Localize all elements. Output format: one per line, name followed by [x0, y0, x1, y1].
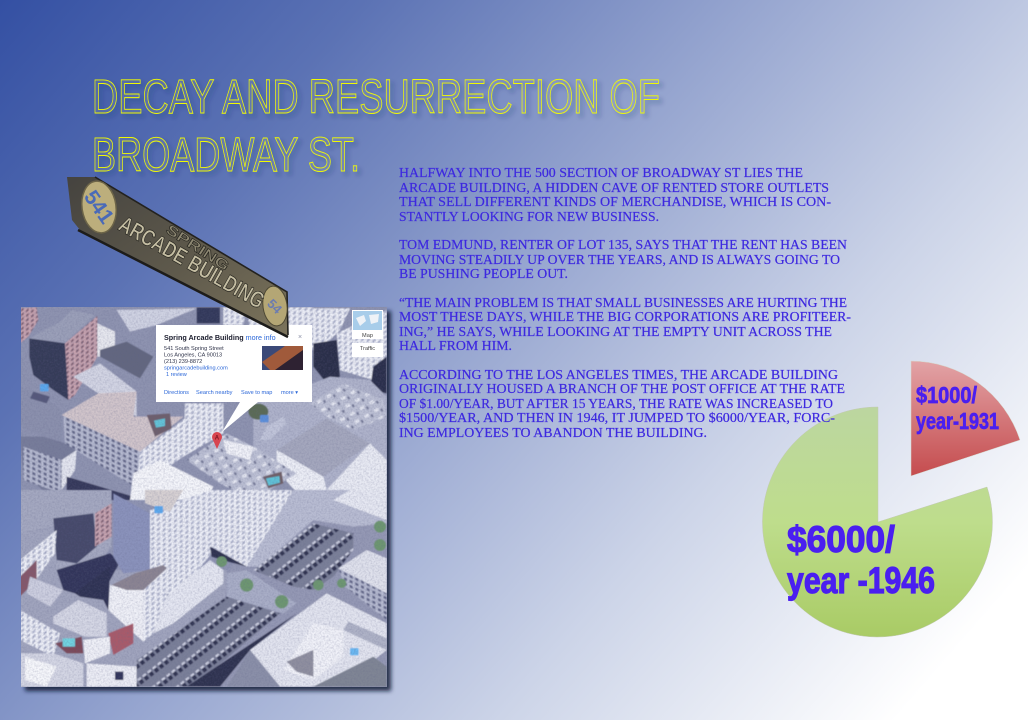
label: 1931: year-1931 [916, 408, 999, 434]
title: DECAY AND RESURRECTION OF [92, 71, 660, 124]
paragraph: los angeles times: ACCORDING TO THE LOS ANGELES TIMES, THE ARCADE BUILDING [399, 368, 838, 383]
title [92, 71, 660, 182]
info heading: Spring Arcade Building more info [164, 333, 276, 342]
sign upper edge [95, 177, 288, 335]
location marker [212, 432, 222, 449]
photo thumbnail [262, 346, 303, 370]
paragraph: arcade building: STANTLY LOOKING FOR NEW BUSINESS. [399, 210, 659, 225]
address: 1 review [166, 372, 188, 378]
close button: × [298, 334, 302, 341]
aerial lower half [20, 490, 390, 690]
address: springarcadebuilding.com [164, 366, 228, 372]
info window [156, 325, 312, 432]
sign medallion: 541: 541 [79, 186, 118, 228]
pie slice: 1931 [911, 361, 1020, 476]
map control: traffic: Traffic [360, 346, 375, 352]
pie chart [762, 361, 1020, 637]
paragraph: tom edmund: TOM EDMUND, RENTER OF LOT 135, SAYS THAT THE RENT HAS BEEN [399, 238, 847, 253]
label: 1946: year -1946 [787, 560, 935, 601]
paragraph: tom edmund [399, 238, 847, 282]
label: 1946 [787, 519, 935, 601]
paragraph: arcade building [399, 166, 831, 225]
label: 1931: $1000/ [916, 382, 978, 408]
sign lettering: spring: SPRING [163, 221, 233, 274]
sign board [67, 177, 288, 337]
paragraph: los angeles times: ORIGINALLY HOUSED A BRANCH OF THE POST OFFICE AT THE RATE [399, 382, 845, 397]
action links: more ▾ [281, 390, 298, 396]
sign lower edge [78, 230, 288, 337]
pie slice: 1946 [762, 407, 992, 637]
paragraph: quote [399, 296, 851, 354]
map control: map: Map [362, 333, 373, 339]
paragraph: los angeles times: $1500/YEAR, AND THEN IN 1946, IT JUMPED TO $6000/YEAR, FORC- [399, 411, 835, 426]
address: 541 South Spring Street [164, 346, 224, 352]
aerial map [20, 307, 390, 690]
action links [164, 390, 298, 395]
action links: Save to map [241, 390, 272, 396]
label: 1946: $6000/ [787, 519, 895, 560]
paragraph: tom edmund: MOVING STEADILY UP OVER THE YEARS, AND IS ALWAYS GOING TO [399, 253, 840, 268]
aerial upper half [20, 307, 390, 500]
paragraph: quote: HALL FROM HIM. [399, 339, 512, 354]
title: BROADWAY ST. [92, 129, 360, 182]
sign medallion: right [260, 285, 290, 327]
address: (213) 239-8872 [164, 359, 202, 365]
paragraph: quote: “THE MAIN PROBLEM IS THAT SMALL BUSINESSES ARE HURTING THE [399, 296, 847, 311]
paragraph: arcade building: THAT SELL DIFFERENT KINDS OF MERCHANDISE, WHICH IS CON- [399, 195, 831, 210]
paragraph: quote: MOST THESE DAYS, WHILE THE BIG CORPORATIONS ARE PROFITEER- [399, 310, 851, 325]
label: 1931 [916, 382, 999, 434]
action links: Search nearby [196, 390, 233, 396]
map control: map [352, 310, 383, 339]
aerial texture [21, 307, 387, 687]
paragraph: arcade building: ARCADE BUILDING, A HIDDEN CAVE OF RENTED STORE OUTLETS [399, 181, 829, 196]
arcade sign [67, 177, 290, 337]
paragraph: quote: ING,” HE SAYS, WHILE LOOKING AT THE EMPTY UNIT ACROSS THE [399, 325, 832, 340]
location marker: A [215, 436, 220, 442]
paragraph: los angeles times [399, 368, 845, 441]
map control: traffic [352, 343, 383, 357]
sign medallion: right: 54 [264, 296, 286, 317]
address [164, 346, 228, 378]
address: Los Angeles, CA 90013 [164, 352, 222, 358]
paragraph: arcade building: HALFWAY INTO THE 500 SECTION OF BROADWAY ST LIES THE [399, 166, 803, 181]
paragraph: los angeles times: OF $1.00/YEAR, BUT AFTER 15 YEARS, THE RATE WAS INCREASED TO [399, 397, 833, 412]
action links: Directions [164, 390, 189, 396]
sign lettering: arcade building: ARCADE BUILDING [115, 211, 269, 314]
article text [399, 166, 851, 441]
paragraph: tom edmund: BE PUSHING PEOPLE OUT. [399, 267, 568, 282]
paragraph: los angeles times: ING EMPLOYEES TO ABANDON THE BUILDING. [399, 426, 707, 441]
